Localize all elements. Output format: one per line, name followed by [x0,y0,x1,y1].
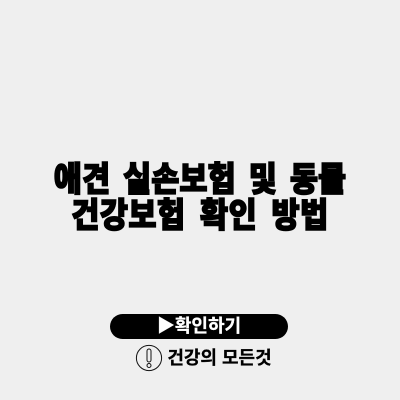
title [54,161,346,235]
title line 1: 애견 실손보험 및 동물 [54,161,346,199]
confirm button: ▶확인하기 [157,316,241,336]
icon: exclamation in circle [136,344,162,372]
brand name: 건강의 모든것 [167,348,272,368]
confirm button [110,314,288,339]
title line 2: 건강보험 확인 방법 [71,197,329,235]
